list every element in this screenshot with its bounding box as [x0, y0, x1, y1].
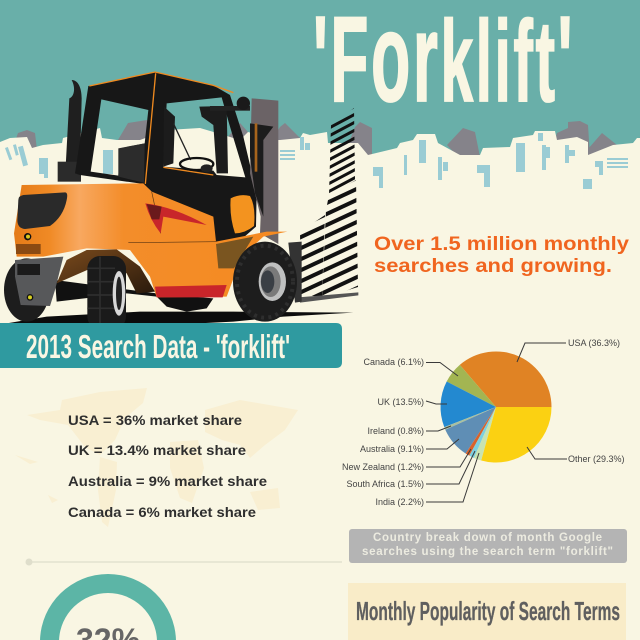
market share list: USA = 36% market share [68, 413, 243, 428]
skyline windows [5, 133, 628, 189]
pie labels [342, 338, 625, 507]
pie labels: USA (36.3%) [568, 338, 620, 348]
market share list: Australia = 9% market share [68, 474, 268, 489]
pie caption: searches using the search term "forklift" [362, 546, 613, 558]
teal sky band [0, 0, 640, 165]
body seam [128, 192, 216, 243]
indicator light [24, 233, 31, 240]
forklift illustration [4, 72, 358, 329]
cream city skyline [0, 128, 640, 240]
pie caption [349, 529, 627, 563]
red skirt stripe [155, 285, 227, 297]
small orange door panel [230, 195, 254, 233]
mast [250, 98, 278, 244]
fork carriage [288, 242, 302, 303]
pie labels: UK (13.5%) [377, 397, 424, 407]
pie labels: Canada (6.1%) [363, 357, 424, 367]
pie labels: Ireland (0.8%) [367, 426, 424, 436]
pie chart: country breakdown [342, 338, 625, 507]
exhaust pipe [66, 80, 82, 167]
grey distant buildings [12, 120, 617, 158]
far rear tyre [4, 258, 49, 322]
market share list: Canada = 6% market share [68, 505, 257, 520]
underside [55, 280, 213, 312]
mirror lamp [210, 106, 250, 111]
orange body [14, 183, 287, 297]
divider [26, 558, 342, 566]
brown panel [216, 237, 253, 268]
panel: monthly popularity heading [348, 583, 626, 640]
market share list: UK = 13.4% market share [68, 443, 247, 458]
cab frame with window openings [75, 72, 257, 245]
banner: 2013 search data [0, 323, 342, 368]
pie labels: Australia (9.1%) [360, 444, 424, 454]
tagline [374, 234, 629, 277]
cab orange trim [89, 72, 233, 184]
pie labels: South Africa (1.5%) [346, 479, 424, 489]
tagline: Over 1.5 million monthly [374, 234, 629, 255]
pie leader lines [426, 343, 567, 502]
tail light [145, 203, 207, 233]
donut stat [40, 574, 176, 640]
tagline: searches and growing. [374, 256, 612, 277]
pie labels: India (2.2%) [375, 497, 424, 507]
striped tower behind the forks [300, 108, 358, 298]
rear wheel [87, 256, 126, 329]
wheel arch [57, 249, 155, 293]
number plate [16, 244, 41, 254]
ground shadow [7, 312, 353, 327]
seat block [118, 143, 145, 183]
pie caption: Country break down of month Google [373, 532, 602, 544]
rear bumper [15, 257, 63, 306]
steering post and controls [199, 106, 228, 173]
pie labels: Other (29.3%) [568, 454, 625, 464]
fork blade [298, 292, 358, 303]
world map watermark [15, 388, 298, 527]
grille [17, 192, 67, 229]
banner: 2013 search data: 2013 Search Data - 'forklift' [26, 328, 290, 365]
front wheel [233, 242, 297, 322]
market share list [68, 413, 268, 520]
engine box [58, 162, 81, 182]
pie labels: New Zealand (1.2%) [342, 462, 424, 472]
